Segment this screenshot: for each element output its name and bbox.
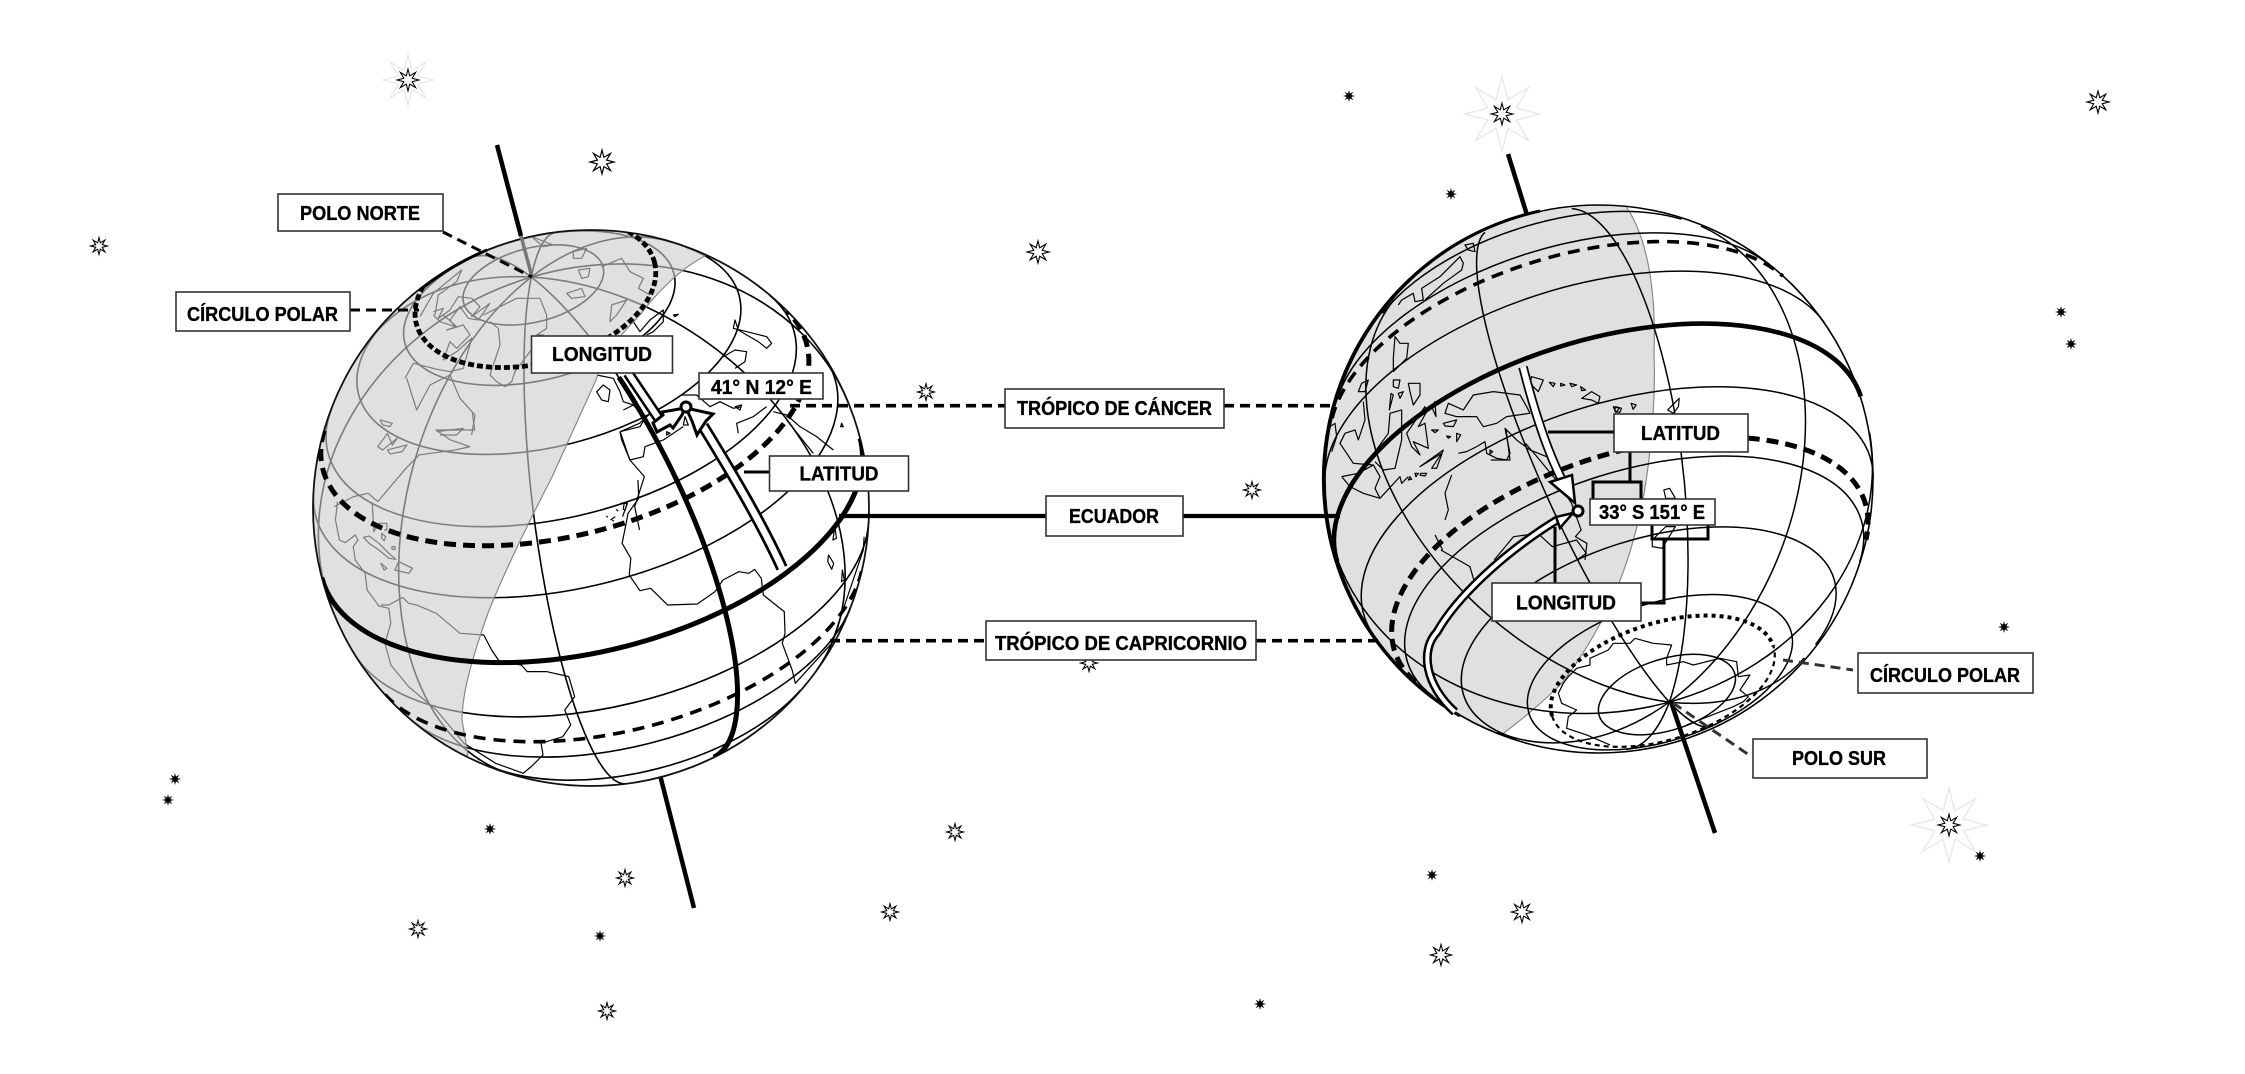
axis: left globe top (497, 145, 521, 236)
leader: ecuador (839, 514, 1340, 518)
pole axis inside shade (521, 236, 532, 277)
leader frames (1548, 432, 1708, 603)
location point (1573, 506, 1583, 516)
limb highlight (1323, 211, 1540, 716)
star halo: lower right (1912, 788, 1986, 862)
polar circle (412, 232, 658, 370)
label: polo sur (1753, 739, 1927, 778)
location point (681, 402, 691, 412)
right globe (1322, 204, 1874, 834)
leader: circulo polar left (350, 308, 419, 312)
bold parallels (318, 232, 864, 757)
label: ecuador: ECUADOR (1069, 506, 1159, 528)
small outlined stars (91, 238, 1260, 1019)
graticule and continents (253, 170, 927, 844)
night shade (300, 225, 707, 780)
label: coordinates north: 41° N 12° E (711, 377, 812, 399)
label: polo sur: POLO SUR (1792, 748, 1887, 770)
equator (1296, 265, 1861, 562)
label: circulo polar right: CÍRCULO POLAR (1870, 664, 2020, 687)
leader: circulo polar right (1783, 660, 1853, 670)
label: latitud left (770, 456, 908, 491)
polar circle lower (1552, 646, 1791, 772)
globe outline (1325, 205, 1873, 753)
leader: tropico de cancer (790, 404, 1335, 408)
label: polo norte: POLO NORTE (300, 203, 420, 225)
left globe (312, 229, 870, 787)
arrow: longitude (1427, 513, 1573, 712)
leader: tropico de capricornio (830, 639, 1380, 643)
label: tropico de cancer (1005, 389, 1224, 428)
label: tropico de cancer: TRÓPICO DE CÁNCER (1017, 396, 1212, 420)
leader: latitud left (744, 470, 770, 474)
label: polo norte (278, 194, 443, 231)
bold meridian (616, 376, 740, 757)
axis: left globe bottom (660, 775, 694, 908)
label: circulo polar left (176, 292, 350, 331)
tropic of cancer (318, 311, 812, 548)
label: tropico de capricornio: TRÓPICO DE CAPRICORNIO (995, 631, 1247, 655)
axis: right globe top (1508, 154, 1527, 215)
star halo: upper left (383, 55, 433, 105)
label: coordinates south: 33° S 151° E (1599, 502, 1705, 524)
night shade (1300, 205, 1654, 735)
continents: antarctica (1558, 638, 1750, 745)
arrow: longitude (628, 373, 685, 432)
label: ecuador (1046, 496, 1183, 536)
star halo: above right globe (1465, 77, 1539, 151)
polar circle upper (1535, 591, 1773, 716)
label: longitud left: LONGITUD (552, 344, 652, 366)
arrow: latitude (1523, 367, 1575, 503)
label: circulo polar left: CÍRCULO POLAR (187, 303, 338, 326)
globe outline (313, 230, 869, 786)
equator (322, 438, 864, 666)
leader: polo norte (443, 232, 532, 277)
globe disc (1325, 205, 1873, 753)
label: longitud right: LONGITUD (1516, 592, 1616, 614)
tropic of cancer (1306, 192, 1783, 418)
continents: asia and pacific (1330, 243, 1619, 520)
label: latitud right: LATITUD (1641, 423, 1720, 445)
tropic of capricorn (1357, 384, 1876, 685)
continents: australia and new zealand (1435, 398, 1679, 560)
tropic of capricorn (385, 570, 862, 744)
graticule (1257, 140, 1940, 820)
axis through south pole (1671, 702, 1715, 833)
small dark stars (163, 91, 2076, 1009)
large outlined stars (590, 91, 2109, 966)
bold parallels (1269, 180, 1942, 819)
leader: polo sur (1673, 703, 1749, 755)
limb highlight (420, 250, 487, 290)
label: longitud right (1492, 583, 1641, 621)
arrow: latitude (686, 408, 782, 568)
graticule inside shade (314, 230, 706, 752)
label: tropico de capricornio (986, 621, 1256, 660)
continents: south america edge (1441, 533, 1586, 583)
label: longitud left (532, 336, 672, 373)
label: latitud right (1614, 414, 1748, 452)
label: circulo polar right (1858, 653, 2033, 693)
label: latitud left: LATITUD (800, 464, 878, 486)
globe disc (313, 230, 869, 786)
